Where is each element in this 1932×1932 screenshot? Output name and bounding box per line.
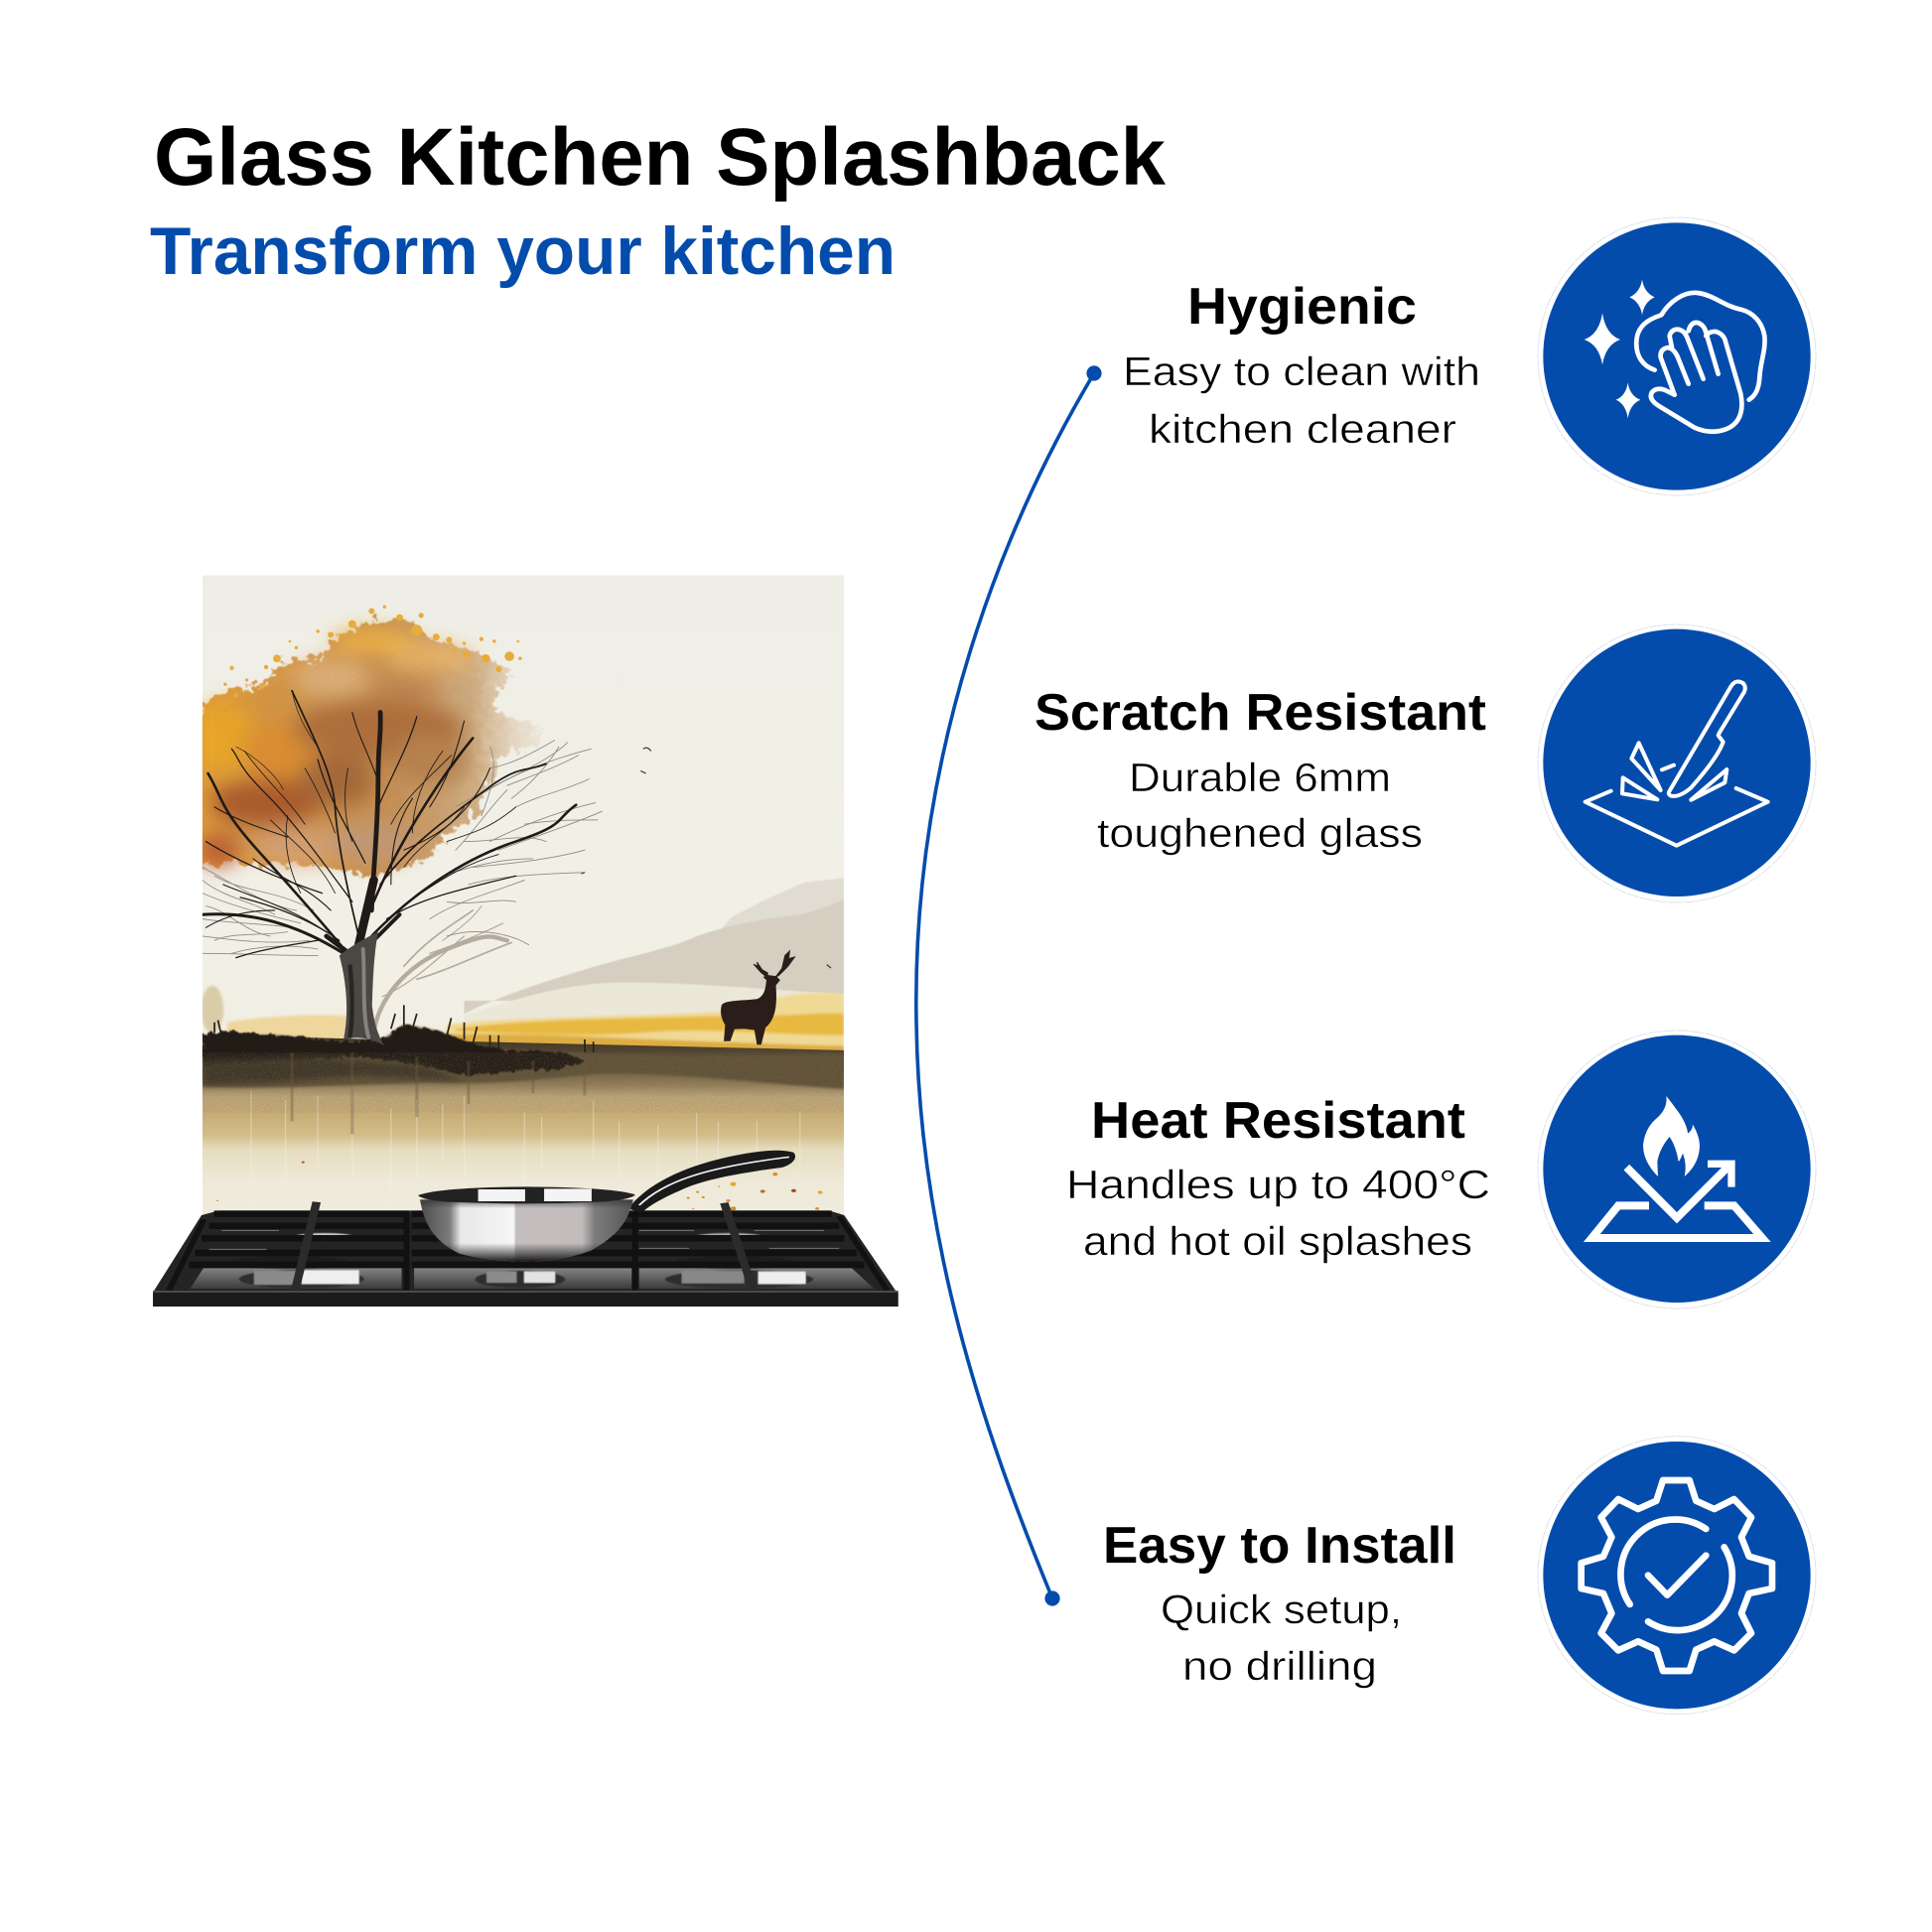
description: kitchen cleaner — [1149, 406, 1456, 452]
heading: Easy to Install — [1103, 1517, 1456, 1575]
oil splatter — [216, 1162, 823, 1210]
feature: scratch resistant — [1035, 684, 1486, 856]
description: Quick setup, — [1161, 1587, 1402, 1632]
heading: Hygienic — [1187, 278, 1417, 336]
heading: Heat Resistant — [1091, 1092, 1465, 1150]
pan handle — [628, 1151, 795, 1213]
bottom dot — [1044, 1590, 1060, 1606]
description — [1097, 755, 1423, 856]
description: Easy to clean with — [1123, 348, 1480, 394]
dark riverbank — [203, 1005, 844, 1134]
title: Glass Kitchen Splashback — [154, 112, 1166, 203]
icon: knife on glass — [1538, 624, 1816, 902]
hob frame — [153, 1210, 898, 1307]
birds and flecks — [582, 748, 831, 968]
description: Handles up to 400°C — [1066, 1162, 1490, 1207]
heading: Scratch Resistant — [1035, 684, 1486, 742]
icon: flame on glass — [1538, 1031, 1816, 1309]
frying pan — [418, 1151, 795, 1262]
subtitle: Transform your kitchen — [150, 213, 896, 289]
description — [1123, 348, 1480, 452]
hob with pan — [153, 1151, 898, 1307]
burners — [229, 1233, 813, 1289]
lake and lower ground wash — [203, 1035, 844, 1183]
grate bars — [169, 1202, 887, 1291]
dark main branches — [203, 691, 576, 962]
connector curve — [916, 365, 1102, 1606]
feature: hygienic — [1123, 278, 1480, 452]
product illustration — [153, 576, 898, 1307]
description: toughened glass — [1097, 810, 1423, 856]
painted glass splashback — [196, 576, 844, 1217]
pan rim — [418, 1186, 635, 1203]
top dot — [1086, 365, 1102, 381]
golden fields — [202, 986, 844, 1054]
front edge — [153, 1293, 898, 1307]
description: Durable 6mm — [1129, 755, 1391, 800]
description: no drilling — [1182, 1643, 1377, 1689]
pale background branches — [373, 906, 511, 1034]
glass cooktop panels — [190, 1266, 875, 1289]
description — [1161, 1587, 1402, 1689]
paint drips — [250, 1084, 800, 1166]
feature: heat resistant — [1066, 1092, 1490, 1264]
trunk — [340, 932, 384, 1045]
icon: gear with check — [1538, 1437, 1816, 1715]
tree — [203, 691, 602, 1045]
description: and hot oil splashes — [1083, 1218, 1472, 1264]
distant hills — [465, 878, 844, 1023]
stag silhouette — [721, 951, 795, 1044]
foliage wash — [196, 605, 546, 878]
infographic canvas — [151, 125, 1817, 1716]
icon: cleaning hand — [1538, 217, 1816, 495]
description — [1066, 1162, 1490, 1264]
feature: easy to install — [1103, 1517, 1456, 1689]
pan bowl — [420, 1199, 633, 1262]
